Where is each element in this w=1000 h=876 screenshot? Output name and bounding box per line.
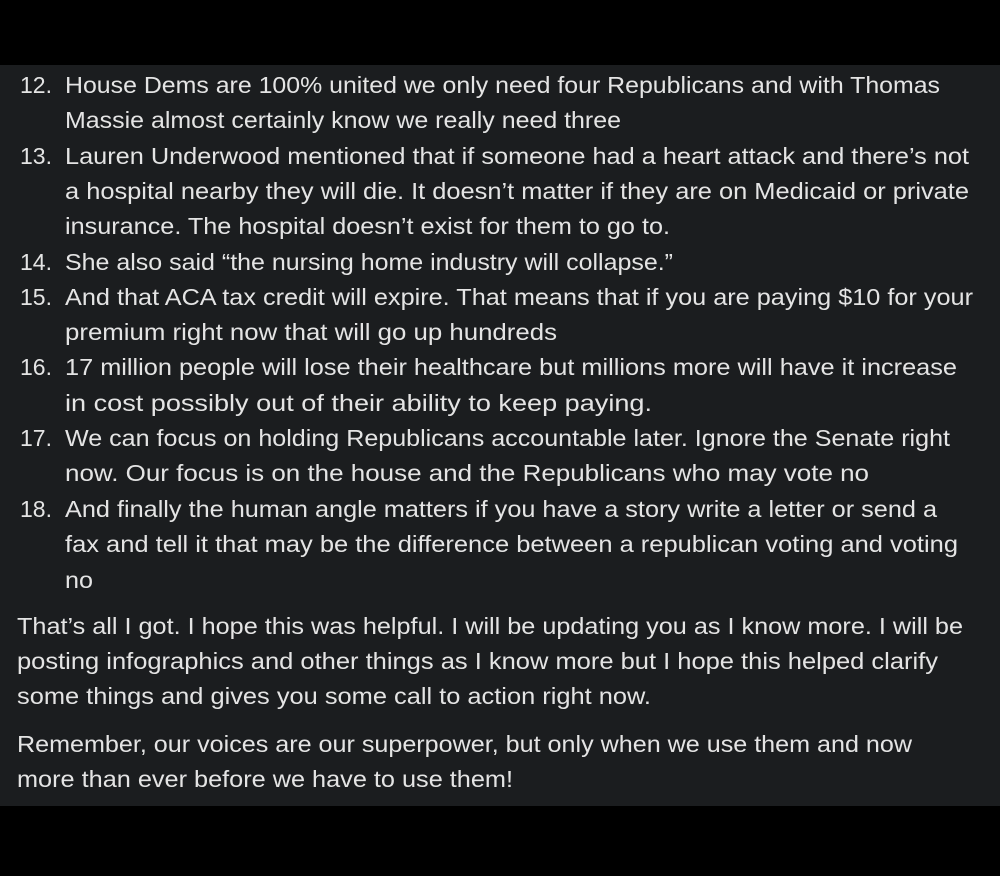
item 17: now. Our focus is on the house and the Republicans who may vote no — [65, 460, 869, 486]
item 15: premium right now that will go up hundreds — [65, 319, 557, 345]
item 16: 17 million people will lose their healthcare but millions more will have it increase — [65, 354, 957, 380]
item 12 — [20, 72, 940, 133]
item 18: 18. — [20, 496, 52, 522]
item 12: House Dems are 100% united we only need four Republicans and with Thomas — [65, 72, 940, 98]
item 13: insurance. The hospital doesn’t exist for them to go to. — [65, 213, 670, 239]
item 13: a hospital nearby they will die. It doesn’t matter if they are on Medicaid or private — [65, 178, 969, 204]
item 12: Massie almost certainly know we really need three — [65, 107, 621, 133]
paragraph: call to action: more than ever before we have to use them! — [17, 766, 513, 792]
item 16: 16. — [20, 354, 52, 380]
item 13: 13. — [20, 143, 52, 169]
item 18: And finally the human angle matters if you have a story write a letter or send a — [65, 496, 937, 522]
item 17: We can focus on holding Republicans accountable later. Ignore the Senate right — [65, 425, 951, 451]
item 18: fax and tell it that may be the difference between a republican voting and voting — [65, 531, 958, 557]
item 16 — [20, 354, 957, 416]
numbered list — [20, 72, 973, 593]
item 18: no — [65, 567, 93, 593]
item 13: Lauren Underwood mentioned that if someone had a heart attack and there’s not — [65, 143, 970, 169]
item 14: She also said “the nursing home industry will collapse.” — [65, 249, 673, 275]
item 18 — [20, 496, 958, 593]
item 15: 15. — [20, 284, 52, 310]
paragraph: closing note: That’s all I got. I hope this was helpful. I will be updating you as I know more. I will be — [17, 613, 963, 639]
item 13 — [20, 143, 970, 239]
item 12: 12. — [20, 72, 52, 98]
item 17 — [20, 425, 951, 486]
item 14: 14. — [20, 249, 52, 275]
item 15: And that ACA tax credit will expire. That means that if you are paying $10 for your — [65, 284, 973, 310]
paragraph: closing note: posting infographics and other things as I know more but I hope this helped clarify — [17, 648, 939, 674]
item 17: 17. — [20, 425, 52, 451]
paragraph: closing note — [17, 613, 963, 709]
paragraph: call to action: Remember, our voices are our superpower, but only when we use them and now — [17, 731, 912, 757]
item 16: in cost possibly out of their ability to keep paying. — [65, 390, 652, 416]
item 15 — [20, 284, 973, 345]
paragraph: call to action — [17, 731, 912, 792]
paragraph: closing note: some things and gives you some call to action right now. — [17, 683, 651, 709]
